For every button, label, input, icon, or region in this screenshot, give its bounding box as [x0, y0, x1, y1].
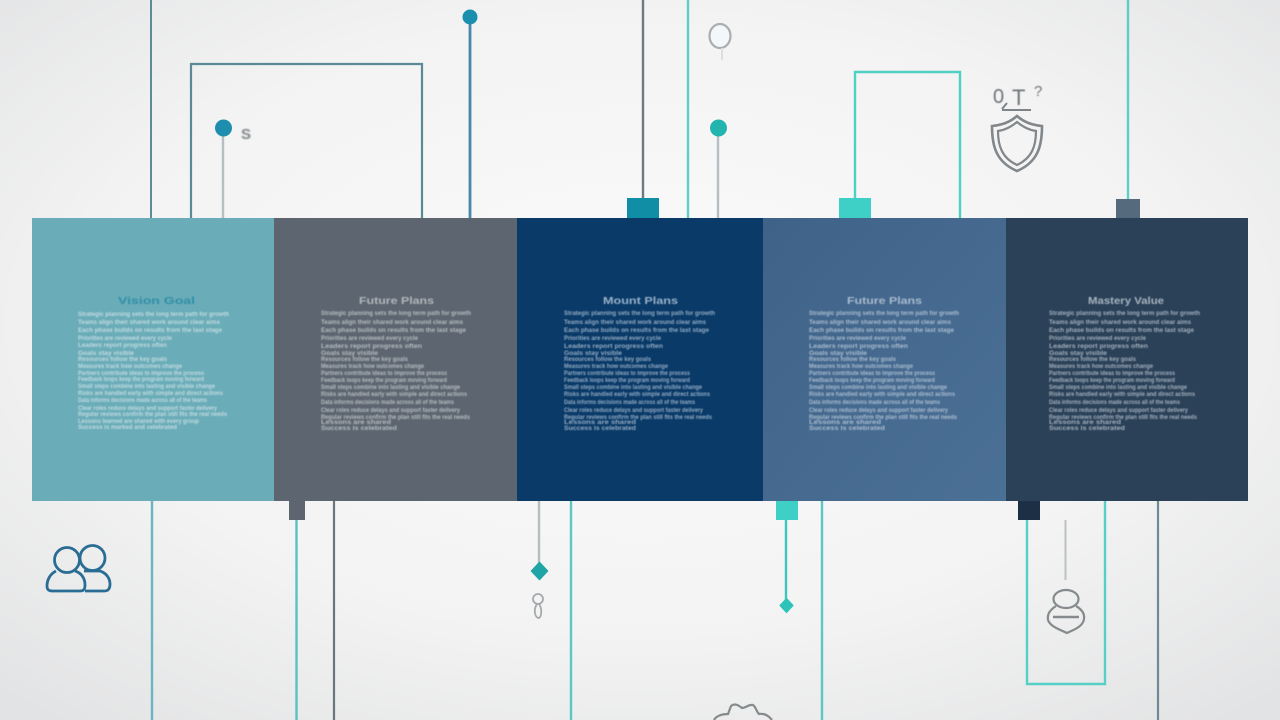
text block: column 5: Priorities are reviewed every cycle [1049, 335, 1147, 342]
connector: aqua bracket with block [839, 72, 960, 218]
text block: column 3: Regular reviews confirm the plan still fits the real needs [564, 414, 712, 421]
text block: column 1: Teams align their shared work around clear aims [78, 319, 221, 326]
text block: column 3: Strategic planning sets the long term path for growth [564, 310, 715, 317]
text block: column 2: Goals stay visible [321, 350, 379, 357]
connector: bracket column 1-2 [191, 64, 422, 218]
text block: column 3: Risks are handled early with simple and direct actions [564, 391, 711, 398]
icon: small glyph: S [241, 126, 251, 143]
text block: column 4: Data informs decisions made across all of the teams [809, 399, 940, 406]
text block: column 2: Partners contribute ideas to improve the process [321, 370, 447, 377]
text block: column 5: Risks are handled early with simple and direct actions [1049, 391, 1196, 398]
text block: column 1: Goals stay visible [78, 350, 135, 357]
connector: aqua line [687, 0, 689, 218]
text block: column 3: Leaders report progress often [564, 343, 663, 350]
heading: column 1: Vision Goal [118, 295, 195, 307]
text block: column 2: Lessons are shared [321, 419, 391, 426]
icon: gear (cropped) [714, 705, 772, 720]
text block: column 4: Risks are handled early with simple and direct actions [809, 391, 956, 398]
text block: column 3: Each phase builds on results from the last stage [564, 327, 710, 334]
connector: line with teal block [627, 0, 659, 218]
text block: column 5: Teams align their shared work around clear aims [1049, 319, 1192, 326]
text block: column 3: Priorities are reviewed every cycle [564, 335, 662, 342]
text block: column 1: Small steps combine into lasting and visible change [78, 383, 215, 390]
icon: users [47, 546, 110, 591]
text block: column 1: Feedback loops keep the program moving forward [78, 376, 204, 383]
connector: aqua line column 3 [570, 501, 572, 720]
panel: column 3 [517, 218, 763, 501]
text block: column 2: Success is celebrated [321, 425, 397, 432]
text block: column 3: Small steps combine into lasting and visible change [564, 384, 702, 391]
text block: column 4: Feedback loops keep the program moving forward [809, 377, 935, 384]
text block: column 1: Clear roles reduce delays and support faster delivery [78, 405, 217, 412]
pin: aqua dot [710, 120, 727, 218]
icon: badge figure [1048, 590, 1084, 633]
panel: column 5 [1006, 218, 1248, 501]
text block: column 5: Success is celebrated [1049, 425, 1125, 432]
text block: column 5: Small steps combine into lasting and visible change [1049, 384, 1187, 391]
text block: column 5: Data informs decisions made across all of the teams [1049, 399, 1180, 406]
text block: column 2: Each phase builds on results from the last stage [321, 327, 467, 334]
text block: column 5: Leaders report progress often [1049, 343, 1148, 350]
text block: column 3 [564, 310, 715, 432]
text block: column 4: Goals stay visible [809, 350, 868, 357]
icon: small hook [533, 594, 543, 618]
text block: column 1: Lessons learned are shared with every group [78, 418, 199, 425]
text block: column 5: Goals stay visible [1049, 350, 1108, 357]
text block: column 2: Clear roles reduce delays and support faster delivery [321, 407, 460, 414]
icon: shield with label: ? [1034, 83, 1042, 100]
text block: column 2 [321, 310, 471, 432]
text block: column 4: Small steps combine into lasting and visible change [809, 384, 947, 391]
text block: column 1 [78, 311, 229, 431]
text block: column 2: Risks are handled early with simple and direct actions [321, 391, 468, 398]
text block: column 3: Success is celebrated [564, 425, 636, 432]
text block: column 5: Clear roles reduce delays and support faster delivery [1049, 407, 1188, 414]
text block: column 4: Priorities are reviewed every cycle [809, 335, 907, 342]
text block: column 2: Regular reviews confirm the plan still fits the real needs [321, 414, 470, 421]
text block: column 5: Feedback loops keep the program moving forward [1049, 377, 1175, 384]
connector: line column 1 [151, 501, 153, 720]
text block: column 2: Priorities are reviewed every cycle [321, 335, 419, 342]
text block: column 3: Measures track how outcomes change [564, 363, 669, 370]
connector: block with line column 2 [289, 501, 305, 720]
text block: column 2: Strategic planning sets the long term path for growth [321, 310, 471, 317]
text block: column 5: Regular reviews confirm the plan still fits the real needs [1049, 414, 1197, 421]
text block: column 1: Priorities are reviewed every cycle [78, 335, 173, 342]
text block: column 2: Small steps combine into lasting and visible change [321, 384, 460, 391]
pin: aqua block and diamond [776, 501, 798, 612]
text block: column 5: Each phase builds on results from the last stage [1049, 327, 1195, 334]
text block: column 2: Leaders report progress often [321, 343, 422, 350]
pin: blue dot [215, 120, 232, 218]
heading: column 3: Mount Plans [603, 295, 678, 307]
text block: column 1: Strategic planning sets the long term path for growth [78, 311, 229, 318]
heading: column 4: Future Plans [847, 295, 922, 307]
text block: column 1: Success is marked and celebrated [78, 424, 177, 431]
text block: column 3: Clear roles reduce delays and support faster delivery [564, 407, 703, 414]
text block: column 5: Strategic planning sets the long term path for growth [1049, 310, 1200, 317]
text block: column 5: Measures track how outcomes change [1049, 363, 1154, 370]
text block: column 4: Success is celebrated [809, 425, 885, 432]
bottom connectors [47, 501, 1158, 720]
text block: column 3: Goals stay visible [564, 350, 623, 357]
icon: shield with label [992, 83, 1042, 171]
text block: column 4: Lessons are shared [809, 419, 881, 426]
text block: column 3: Data informs decisions made across all of the teams [564, 399, 695, 406]
text block: column 2: Data informs decisions made across all of the teams [321, 399, 454, 406]
text block: column 2: Teams align their shared work around clear aims [321, 319, 464, 326]
text block: column 5: Lessons are shared [1049, 419, 1121, 426]
icon: shield with label: T [1012, 85, 1025, 110]
connector: grey line above icon [1064, 520, 1066, 580]
text block: column 3: Teams align their shared work around clear aims [564, 319, 707, 326]
text block: column 3: Partners contribute ideas to improve the process [564, 370, 690, 377]
panel: column 2 [274, 218, 517, 501]
text block: column 1: Risks are handled early with simple and direct actions [78, 390, 224, 397]
text block: column 1: Leaders report progress often [78, 342, 167, 349]
text block: column 2: Feedback loops keep the program moving forward [321, 377, 447, 384]
connector: aqua line column 4 [821, 501, 823, 720]
icon: shield with label: 0 [993, 86, 1004, 108]
connector: vertical line column 1 [150, 0, 152, 218]
text block: column 3: Resources follow the key goals [564, 356, 652, 363]
text block: column 4: Measures track how outcomes change [809, 363, 914, 370]
text block: column 4: Clear roles reduce delays and support faster delivery [809, 407, 948, 414]
text block: column 1: Each phase builds on results from the last stage [78, 327, 223, 334]
connector: grey line column 5 [1157, 501, 1159, 720]
text block: column 1: Resources follow the key goals [78, 356, 168, 363]
text block: column 1: Measures track how outcomes change [78, 363, 183, 370]
text block: column 4 [809, 310, 959, 432]
connector: aqua bracket with dark block [1018, 501, 1105, 684]
connector: aqua line with slate block [1116, 0, 1140, 218]
top connectors [151, 0, 1140, 218]
text block: column 3: Lessons are shared [564, 419, 636, 426]
text block: column 2: Measures track how outcomes change [321, 363, 424, 370]
text block: column 4: Leaders report progress often [809, 343, 908, 350]
text block: column 1: Partners contribute ideas to improve the process [78, 370, 204, 377]
pin: top blue dot [462, 10, 478, 218]
text block: column 4: Partners contribute ideas to improve the process [809, 370, 935, 377]
text block: column 4: Regular reviews confirm the plan still fits the real needs [809, 414, 957, 421]
pin: teal diamond [532, 501, 548, 580]
text block: column 5: Partners contribute ideas to improve the process [1049, 370, 1175, 377]
text block: column 1: Regular reviews confirm the plan still fits the real needs [78, 411, 227, 418]
text block: column 4: Teams align their shared work around clear aims [809, 319, 952, 326]
text block: column 5 [1049, 310, 1200, 432]
connector: grey line column 2 [333, 501, 335, 720]
text block: column 4: Each phase builds on results from the last stage [809, 327, 955, 334]
text block: column 4: Resources follow the key goals [809, 356, 897, 363]
text block: column 2: Resources follow the key goals [321, 356, 409, 363]
text block: column 5: Resources follow the key goals [1049, 356, 1137, 363]
panel: column 1 [32, 218, 274, 501]
heading: column 5: Mastery Value [1088, 295, 1164, 307]
text block: column 4: Strategic planning sets the long term path for growth [809, 310, 959, 317]
panel: column 4 [763, 218, 1006, 501]
heading: column 2: Future Plans [359, 295, 434, 307]
text block: column 3: Feedback loops keep the program moving forward [564, 377, 690, 384]
text block: column 1: Data informs decisions made across all of the teams [78, 397, 207, 404]
icon: ring [710, 24, 730, 60]
